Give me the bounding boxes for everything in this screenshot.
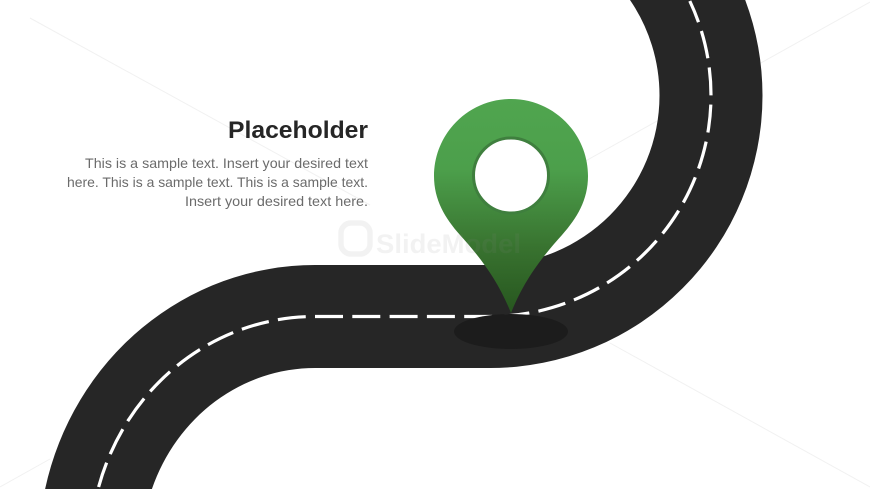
body text: here. This is a sample text. This is a sample text.	[67, 174, 368, 190]
heading: Placeholder	[228, 117, 368, 144]
watermark	[341, 223, 521, 259]
watermark: SlideModel	[376, 229, 521, 259]
location pin	[434, 99, 588, 313]
pin body	[434, 99, 588, 313]
pin hole	[474, 138, 548, 213]
body text: Insert your desired text here.	[185, 193, 368, 209]
text block	[67, 117, 368, 209]
road centre dashes, right part	[315, 1, 711, 316]
road centre dashes, left part	[99, 316, 315, 487]
pin shadow	[454, 314, 568, 349]
body text: This is a sample text. Insert your desired text	[85, 155, 368, 171]
body text	[67, 155, 368, 209]
